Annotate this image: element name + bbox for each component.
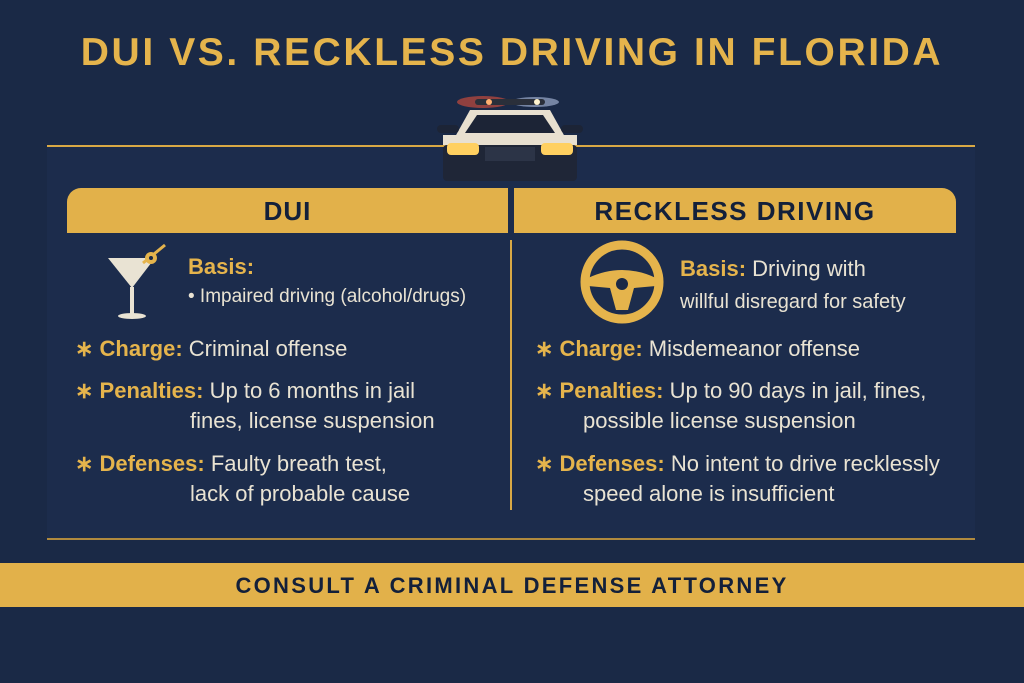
gold line top [47, 145, 975, 147]
header: DUI: DUI [264, 196, 311, 226]
reckless basis [680, 256, 906, 313]
header: reckless driving [514, 188, 956, 233]
bottom line [47, 538, 975, 540]
divider [510, 240, 512, 510]
reckless charge: ∗ Charge: Misdemeanor offense [535, 336, 860, 361]
title: DUI VS. RECKLESS DRIVING IN FLORIDA [81, 31, 943, 74]
footer banner: CONSULT A CRIMINAL DEFENSE ATTORNEY [235, 573, 789, 598]
DUI basis: Basis: [188, 254, 254, 279]
DUI penalties: ∗ Penalties: Up to 6 months in jail [75, 378, 415, 403]
DUI charge: ∗ Charge: Criminal offense [75, 336, 347, 361]
reckless basis: Basis: Driving with [680, 256, 866, 281]
icon: police car [437, 96, 583, 181]
header: reckless driving: RECKLESS DRIVING [594, 196, 876, 226]
DUI basis [188, 254, 466, 307]
DUI penalties: fines, license suspension [190, 408, 435, 433]
icon: martini [108, 244, 166, 319]
icon: steering wheel [580, 240, 664, 324]
header: DUI [67, 188, 508, 233]
DUI penalties [75, 378, 435, 433]
reckless penalties [535, 378, 926, 433]
reckless defenses: ∗ Defenses: No intent to drive recklessly [535, 451, 940, 476]
reckless defenses: speed alone is insufficient [583, 481, 835, 506]
DUI basis: • Impaired driving (alcohol/drugs) [188, 286, 466, 307]
reckless penalties: ∗ Penalties: Up to 90 days in jail, fines, [535, 378, 926, 403]
DUI defenses [75, 451, 410, 506]
footer banner [0, 563, 1024, 607]
reckless defenses [535, 451, 940, 506]
panel background [47, 147, 975, 539]
reckless basis: willful disregard for safety [680, 291, 906, 313]
reckless penalties: possible license suspension [583, 408, 856, 433]
DUI defenses: lack of probable cause [190, 481, 410, 506]
DUI defenses: ∗ Defenses: Faulty breath test, [75, 451, 387, 476]
